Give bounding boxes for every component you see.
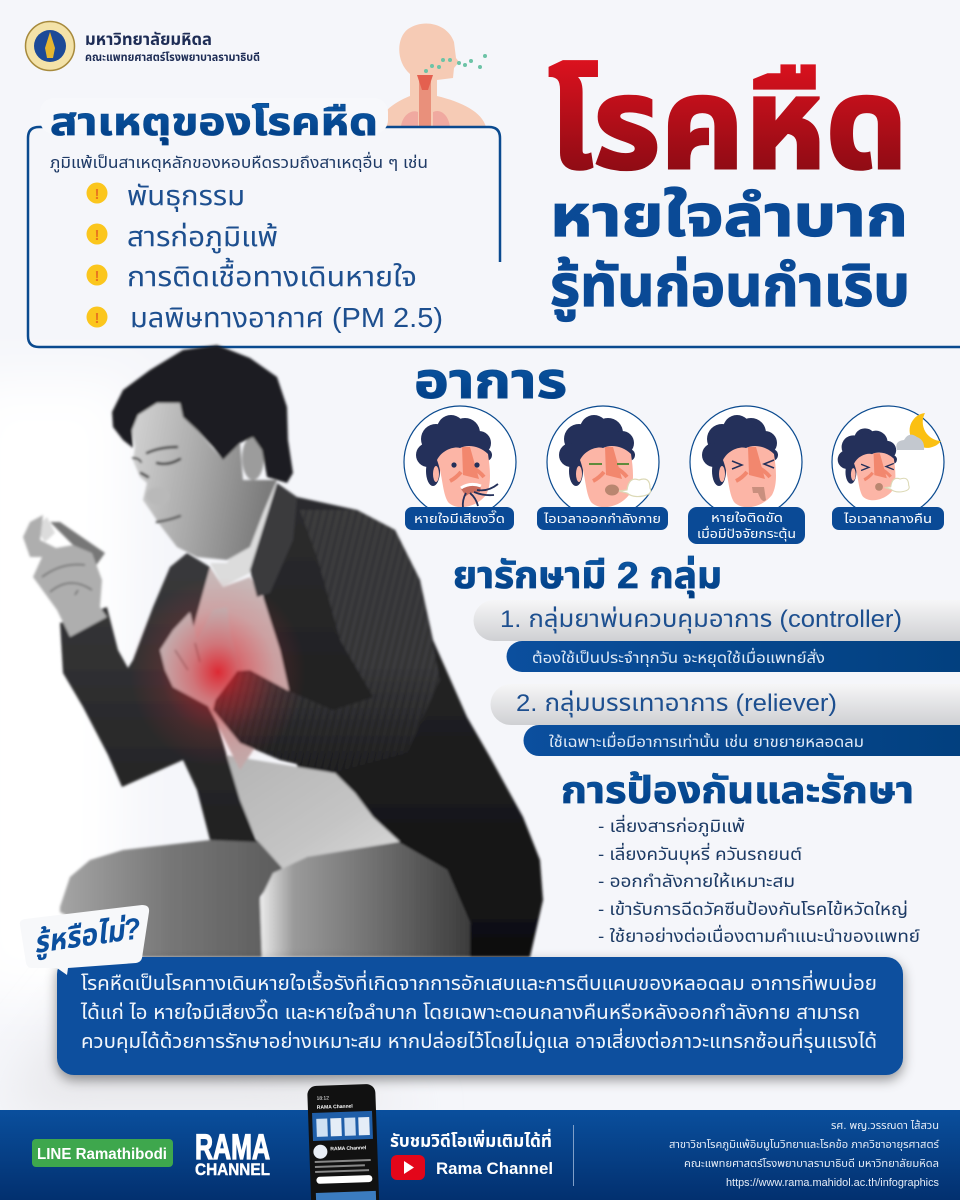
heading: prevention: การป้องกันและรักษา (561, 770, 914, 811)
neck (210, 483, 277, 587)
channel name: Rama Channel (436, 1159, 553, 1178)
credits: รศ. พญ.วรรณดา ไส้สวน (831, 1120, 939, 1132)
icon: warning badges: ! (94, 310, 100, 327)
credits: คณะแพทยศาสตร์โรงพยาบาลรามาธิบดี มหาวิทยาลัยมหิดล (684, 1158, 939, 1170)
LINE badge: LINE Ramathibodi (37, 1146, 167, 1163)
icon: moon and cloud (896, 413, 941, 450)
raised hand (23, 515, 107, 637)
sleeve across chest (213, 510, 440, 773)
prevention list: - เข้ารับการฉีดวัคซีนป้องกันโรคไข้หวัดใหญ่ (598, 899, 908, 919)
logo: RAMA Channel (195, 1128, 270, 1179)
illustration: respiratory anatomy (378, 23, 487, 127)
symptom label: wheezing (405, 507, 514, 530)
title block (548, 53, 910, 322)
credits: สาขาวิชาโรคภูมิแพ้อิมมูโนวิทยาและโรคข้อ ภาควิชาอายุรศาสตร์ (669, 1139, 940, 1151)
photo: man using an inhaler (23, 345, 543, 957)
subtitle line 1: หายใจลำบาก (550, 184, 908, 249)
upper t-shirt (190, 567, 290, 770)
symptom label: chest tightness: หายใจติดขัด (711, 511, 783, 525)
logo: Mahidol University (26, 22, 260, 70)
logo: RAMA Channel: RAMA (195, 1128, 270, 1167)
hand on chest (160, 607, 240, 707)
heading: causes: สาเหตุของโรคหืด (50, 102, 378, 145)
credits: https://www.rama.mahidol.ac.th/infographics (726, 1177, 939, 1189)
lower t-shirt (225, 755, 400, 869)
medicine group 2: ใช้เฉพาะเมื่อมีอาการเท่านั้น เช่น ยาขยายหลอดลม (549, 731, 864, 751)
prevention list: - เลี่ยงสารก่อภูมิแพ้ (598, 814, 745, 838)
panel frame (28, 127, 960, 347)
logo: RAMA Channel: CHANNEL (195, 1161, 270, 1179)
credits (669, 1120, 940, 1189)
symptom label: cough after exercise (537, 507, 668, 530)
section: symptoms (404, 353, 944, 544)
phone mockup (307, 1084, 379, 1200)
phone mockup: 18:12 (316, 1095, 329, 1102)
callout text: ควบคุมได้ด้วยการรักษาอย่างเหมาะสม หากปล่อยไว้โดยไม่ดูแล อาจเสี่ยงต่อภาวะแทรกซ้อนที่รุนแรงได้ (81, 1028, 877, 1054)
face (132, 403, 277, 560)
LINE badge (32, 1139, 173, 1167)
symptom: cough after exercise (547, 406, 659, 518)
icon: video play button (391, 1155, 425, 1180)
phone mockup: RAMA Channel (317, 1104, 353, 1111)
icon: warning badges: ! (94, 268, 100, 285)
symptom label: night cough: ไอเวลากลางคืน (843, 512, 932, 526)
panel: causes of asthma (28, 98, 960, 347)
heading: two groups of medicine: ยารักษามี 2 กลุ่ม (453, 555, 722, 598)
symptom: chest tightness with triggers (690, 406, 802, 518)
callout text (80, 970, 877, 1054)
symptom: wheezing (404, 406, 516, 518)
medicine group 2: 2. กลุ่มบรรเทาอาการ (reliever) (516, 689, 837, 718)
callout text: ได้แก่ ไอ หายใจมีเสียงวี๊ด และหายใจลำบาก โดยเฉพาะตอนกลางคืนหรือหลังออกกำลังกาย สามารถ (80, 999, 860, 1024)
callout panel (57, 957, 903, 1075)
knee (260, 843, 470, 957)
icon: warning badges: ! (94, 227, 100, 244)
list of causes: พันธุกรรม (127, 180, 245, 212)
prevention list (598, 814, 920, 946)
footer band (0, 1084, 960, 1200)
symptom label: wheezing: หายใจมีเสียงวี๊ด (414, 510, 505, 526)
video prompt text: รับชมวิดีโอเพิ่มเติมได้ที่ (390, 1128, 552, 1151)
ear (242, 436, 264, 480)
symptom label: cough after exercise: ไอเวลาออกกำลังกาย (543, 512, 661, 526)
phone mockup: RAMA Channel (330, 1145, 367, 1152)
left jacket panel and raised arm (60, 553, 257, 842)
trousers (60, 840, 283, 957)
symptom label: night cough (832, 507, 944, 530)
medicine group 2 (490, 684, 960, 756)
jacket body (263, 497, 543, 957)
hair (112, 345, 293, 483)
callout text: โรคหืดเป็นโรคทางเดินหายใจเรื้อรังที่เกิดจากการอักเสบและการตีบแคบของหลอดลม อาการที่พบบ่อย (81, 970, 877, 995)
icon: warning badges (86, 182, 108, 328)
medicine group 1: 1. กลุ่มยาพ่นควบคุมอาการ (controller) (500, 605, 902, 634)
symptom: night cough (832, 406, 944, 518)
callout: did you know (20, 905, 903, 1075)
symptom label: chest tightness (688, 507, 805, 544)
list of causes: การติดเชื้อทางเดินหายใจ (127, 257, 417, 292)
prevention list: - เลี่ยงควันบุหรี่ ควันรถยนต์ (598, 842, 802, 865)
red pain glow (130, 577, 306, 767)
medicine group 1 (474, 600, 960, 672)
list of causes: สารก่อภูมิแพ้ (127, 221, 278, 254)
facial features (133, 447, 180, 522)
subtitle line 2: รู้ทันก่อนกำเริบ (550, 254, 910, 322)
badge: did you know (20, 905, 149, 975)
collar (250, 483, 297, 597)
prevention list: - ใช้ยาอย่างต่อเนื่องตามคำแนะนำของแพทย์ (598, 924, 920, 946)
inhaler (50, 522, 105, 567)
faculty name: คณะแพทยศาสตร์โรงพยาบาลรามาธิบดี (85, 50, 260, 64)
main title: โรคหืด (548, 53, 908, 196)
list of causes: มลพิษทางอากาศ (PM 2.5) (130, 302, 443, 333)
badge: did you know: รู้หรือไม่? (31, 912, 143, 961)
list of causes (127, 180, 443, 333)
heading: symptoms: อาการ (414, 353, 567, 409)
icon: university seal (26, 22, 74, 70)
symptom label: chest tightness: เมื่อมีปัจจัยกระตุ้น (697, 525, 796, 541)
section: prevention and treatment (561, 770, 920, 946)
medicine group 1: ต้องใช้เป็นประจำทุกวัน จะหยุดใช้เมื่อแพทย์สั่ง (532, 647, 825, 667)
prevention list: - ออกกำลังกายให้เหมาะสม (598, 871, 795, 891)
university name: มหาวิทยาลัยมหิดล (85, 30, 212, 49)
section: medication (453, 555, 960, 756)
icon: warning badges: ! (94, 186, 100, 203)
intro text: ภูมิแพ้เป็นสาเหตุหลักของหอบหืดรวมถึงสาเหตุอื่น ๆ เช่น (50, 151, 428, 172)
